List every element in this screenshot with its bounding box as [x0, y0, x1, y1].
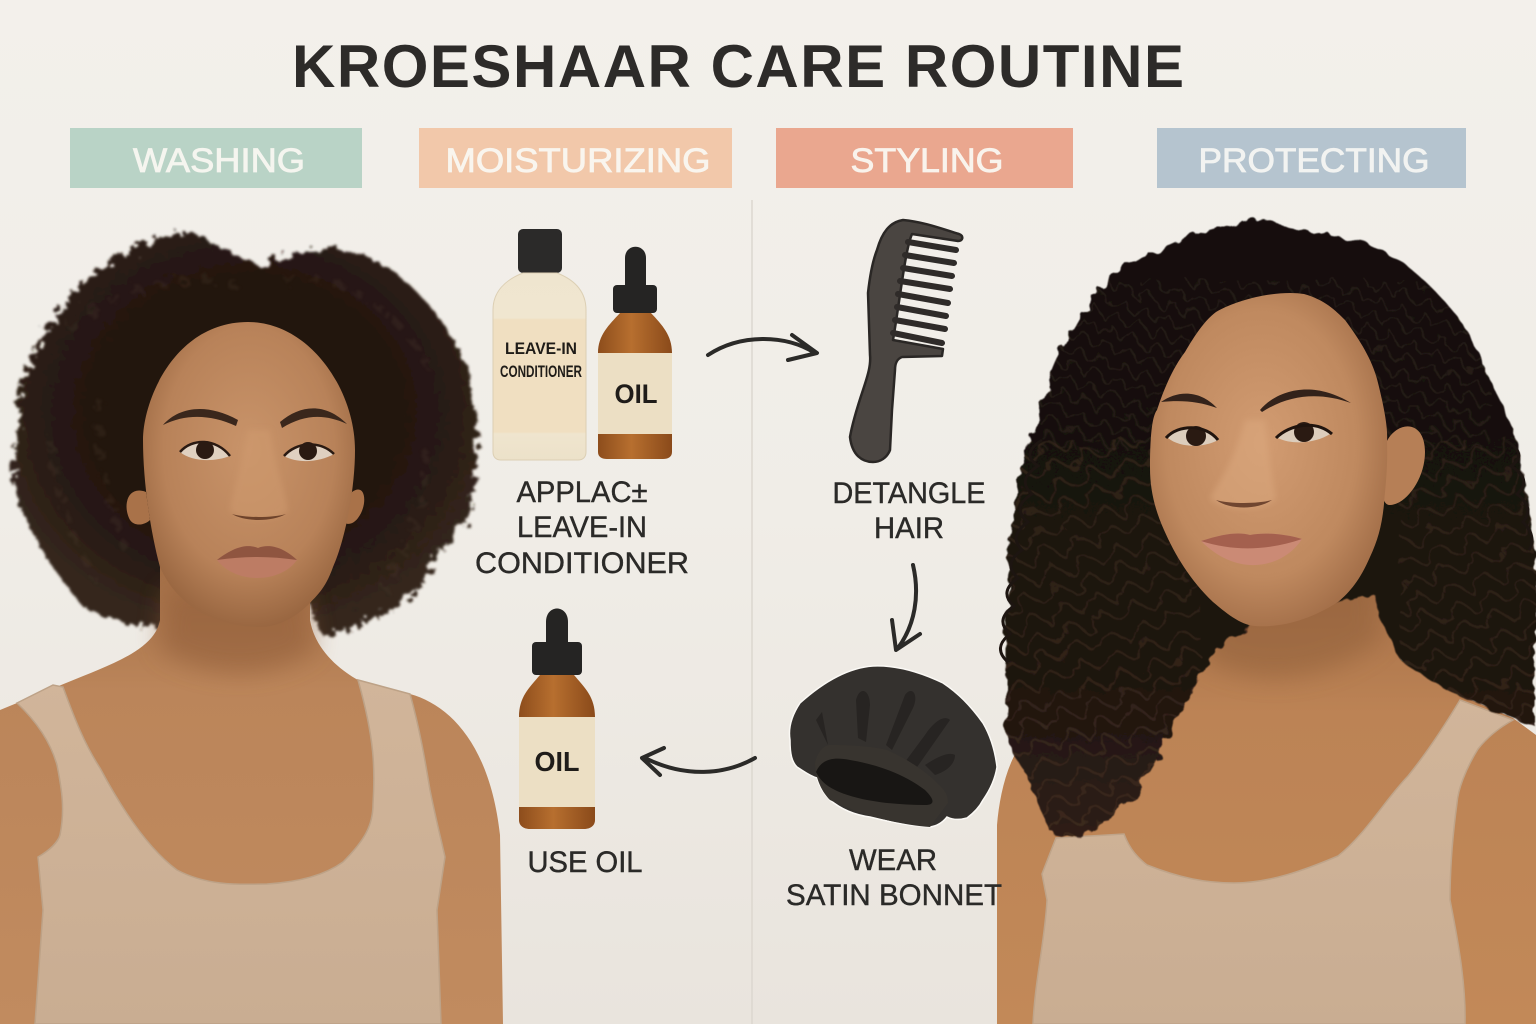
- neck shadow: [160, 590, 315, 672]
- product: oil dropper bottle: [598, 247, 672, 459]
- label: apply leave-in conditioner: LEAVE-IN: [517, 511, 647, 544]
- body: neck and shoulders: [0, 560, 503, 1024]
- face: [1150, 293, 1387, 626]
- portrait: after, defined curls: [997, 220, 1536, 1024]
- lips: smile: [1201, 533, 1302, 565]
- ears: [127, 490, 364, 525]
- arrow: comb to bonnet: [892, 565, 920, 650]
- hair: defined curls: [1000, 220, 1536, 840]
- product: leave-in conditioner bottle: LEAVE-IN: [505, 339, 577, 358]
- tab: styling: STYLING: [850, 142, 1004, 180]
- tank top: [17, 680, 445, 1024]
- eyebrows: [1161, 389, 1351, 412]
- icon: wide-tooth comb: [850, 220, 962, 462]
- tab: washing: WASHING: [133, 142, 305, 180]
- product: oil dropper bottle: OIL: [614, 379, 658, 409]
- label: wear satin bonnet: WEAR: [849, 844, 937, 877]
- label: apply leave-in conditioner: CONDITIONER: [475, 547, 689, 580]
- tab: protecting: PROTECTING: [1198, 142, 1430, 180]
- title: KROESHAAR CARE ROUTINE: [292, 33, 1184, 100]
- label: use oil: USE OIL: [528, 846, 642, 879]
- label: wear satin bonnet: SATIN BONNET: [786, 879, 1002, 912]
- eyebrows: [163, 408, 347, 428]
- eyes: [180, 441, 334, 461]
- nose: [1210, 420, 1276, 508]
- product: leave-in conditioner bottle: [493, 229, 586, 460]
- arrow: conditioner to comb: [708, 335, 817, 360]
- face: [143, 322, 355, 627]
- tab: moisturizing: MOISTURIZING: [446, 142, 710, 180]
- label: detangle hair: HAIR: [874, 512, 944, 545]
- tab: styling: [776, 128, 1073, 188]
- tab: protecting: [1157, 128, 1466, 188]
- tank top: [1033, 700, 1513, 1024]
- neck shadow: [1205, 570, 1380, 677]
- eyes: [1166, 422, 1332, 446]
- body: neck and shoulders: [997, 580, 1536, 1024]
- icon: satin bonnet: [789, 666, 997, 827]
- arrow: bonnet to oil: [642, 748, 755, 775]
- label: detangle hair: DETANGLE: [832, 477, 986, 510]
- portrait: before, frizzy hair: [0, 232, 503, 1024]
- tab: washing: [70, 128, 362, 188]
- product: oil bottle: OIL: [534, 746, 580, 777]
- product: leave-in conditioner bottle: CONDITIONER: [500, 362, 582, 381]
- lips: [217, 546, 297, 578]
- ear: [1382, 426, 1425, 505]
- nose: [230, 430, 288, 519]
- label: apply leave-in conditioner: APPLAC±: [516, 476, 648, 509]
- hair: frizzy afro: [13, 232, 477, 634]
- tab: moisturizing: [419, 128, 732, 188]
- product: oil bottle: [519, 608, 595, 829]
